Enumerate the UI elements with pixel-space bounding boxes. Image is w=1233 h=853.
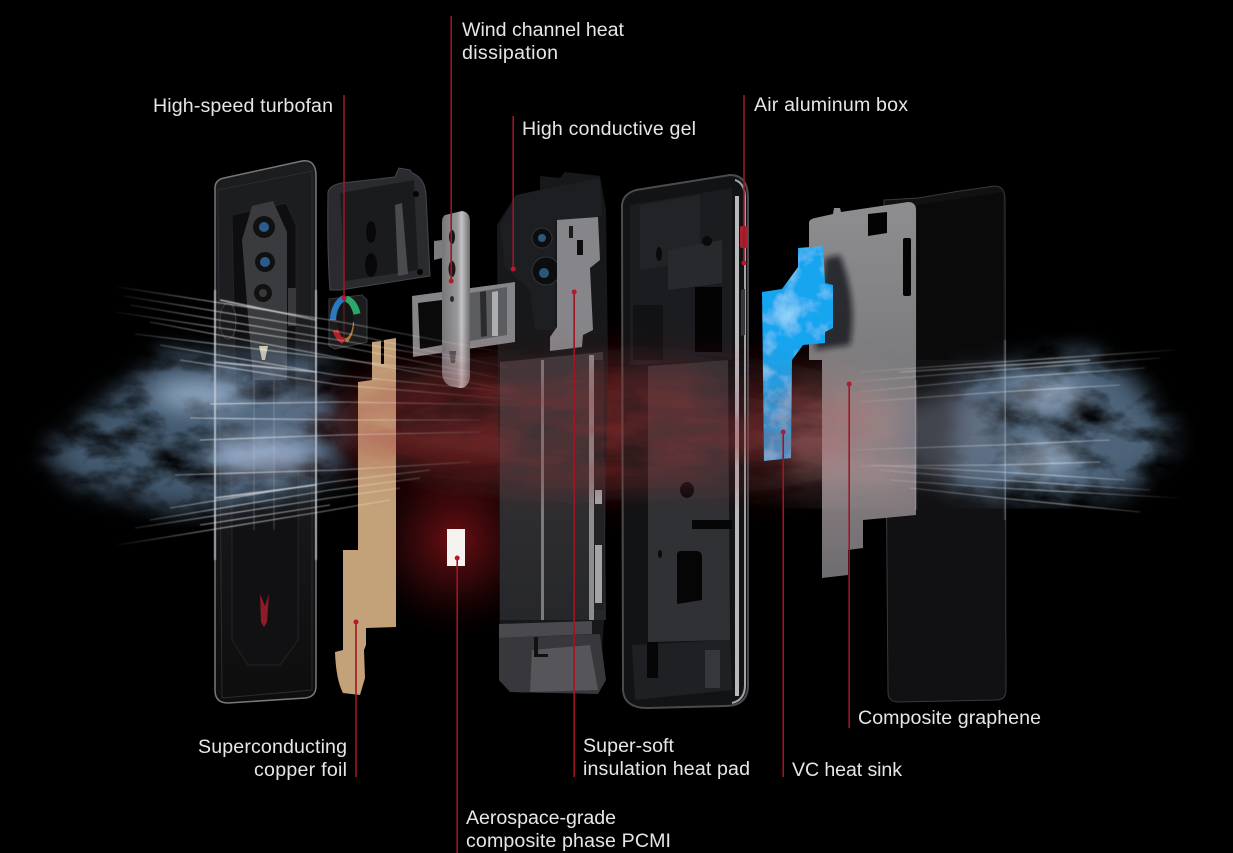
callout leader: superconducting copper foil xyxy=(354,620,358,777)
graphene sheet xyxy=(884,186,1006,702)
sheet cutouts xyxy=(868,212,911,296)
grille xyxy=(741,289,745,336)
callout leader: super-soft insulation heat pad xyxy=(572,290,577,777)
callout leader: composite graphene xyxy=(847,382,852,728)
label: superconducting copper foil: copper foil xyxy=(254,759,347,781)
label: super-soft insulation heat pad: Super-soft xyxy=(583,735,675,757)
lower heat spreader block xyxy=(500,352,606,620)
callout leader: wind channel heat dissipation xyxy=(449,16,454,284)
phone edge highlights through smoke xyxy=(215,290,1005,560)
inner panel outline xyxy=(232,470,298,665)
camera island on back cover xyxy=(232,201,296,400)
callout leader: VC heat sink xyxy=(781,430,786,777)
left smoke plume xyxy=(40,352,340,510)
VC heat sink and heat plate group xyxy=(762,202,916,578)
wind channel bar xyxy=(434,211,470,388)
aerospace-grade phase change chip xyxy=(447,529,465,566)
label: composite graphene: Composite graphene xyxy=(858,707,1041,729)
right smoke plume xyxy=(900,350,1180,505)
sheet shadow xyxy=(815,255,852,350)
high-speed turbofan xyxy=(329,295,367,349)
wind channel bracket xyxy=(412,211,515,388)
frame lower plate xyxy=(632,360,732,700)
callout leader: high conductive gel xyxy=(511,116,516,272)
callout leader: high-speed turbofan xyxy=(342,95,346,340)
red heat glow behind components xyxy=(340,370,880,640)
camera cover panel xyxy=(328,168,430,290)
label: VC heat sink: VC heat sink xyxy=(792,759,902,781)
label: wind channel heat dissipation: Wind channel heat xyxy=(462,19,625,41)
label: high conductive gel: High conductive gel xyxy=(522,118,696,140)
light logo xyxy=(259,346,268,360)
red power button xyxy=(740,226,748,248)
label: wind channel heat dissipation: dissipation xyxy=(462,42,558,64)
silver heat plate sheet xyxy=(809,202,916,578)
phone mid frame xyxy=(622,175,748,708)
VC blue plate xyxy=(762,246,833,461)
red thermal haze xyxy=(325,367,910,505)
cooling vent ornaments xyxy=(220,288,296,339)
label: super-soft insulation heat pad xyxy=(583,735,750,780)
callout leader: aerospace-grade PCMI xyxy=(455,556,460,853)
label: superconducting copper foil xyxy=(198,736,347,781)
silver heat plate xyxy=(550,217,600,351)
lower band xyxy=(499,621,606,694)
right air streaks xyxy=(850,350,1180,512)
label: aerospace-grade composite phase PCMI xyxy=(466,807,671,852)
callout leader: air aluminum box xyxy=(742,95,746,266)
insulation module xyxy=(497,172,608,694)
label: super-soft insulation heat pad: insulation heat pad xyxy=(583,758,750,780)
copper foil xyxy=(335,338,396,695)
left air streaks xyxy=(115,287,520,545)
frame top internals xyxy=(630,188,732,365)
label: aerospace-grade composite phase PCMI: Aerospace-grade xyxy=(466,807,616,829)
red logo xyxy=(260,594,269,627)
label: aerospace-grade composite phase PCMI: composite phase PCMI xyxy=(466,830,671,852)
label: wind channel heat dissipation xyxy=(462,19,625,64)
label: air aluminum box: Air aluminum box xyxy=(754,94,908,116)
label: high-speed turbofan: High-speed turbofan xyxy=(153,95,333,117)
label: superconducting copper foil: Superconducting xyxy=(198,736,347,758)
phone back cover xyxy=(215,161,316,703)
